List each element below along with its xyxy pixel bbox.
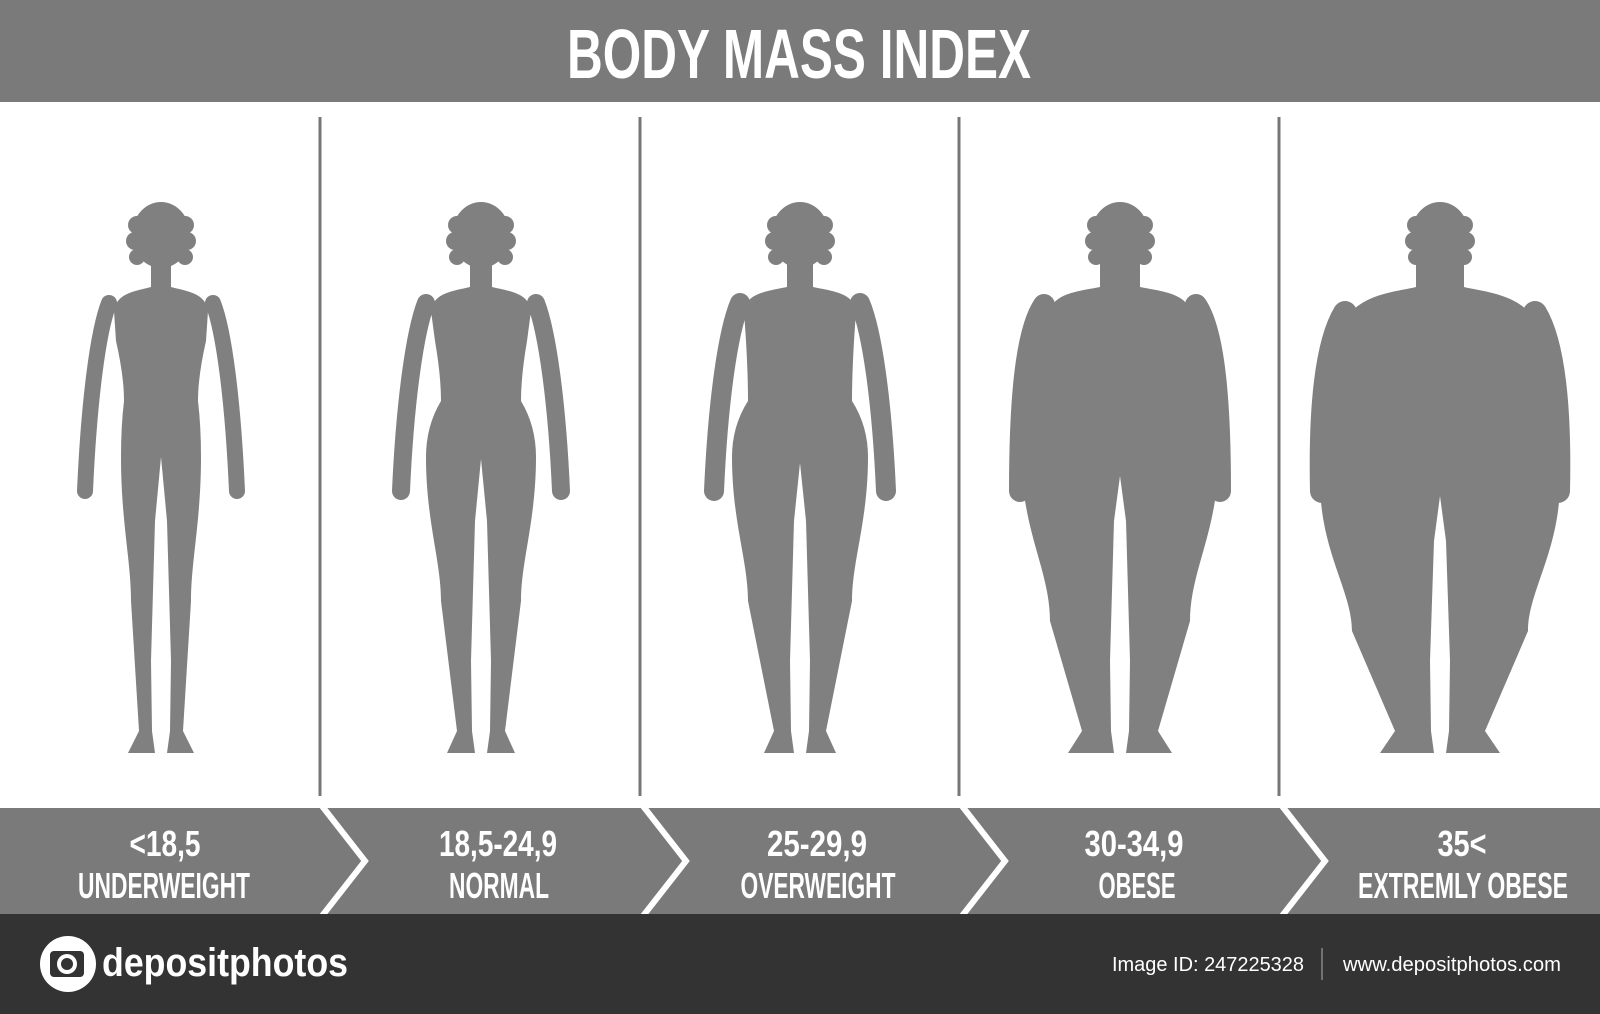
chevron arrows	[322, 806, 1325, 916]
label: normal	[439, 823, 557, 906]
label: obese: OBESE	[1098, 865, 1176, 906]
icon: logo camera	[40, 936, 96, 992]
separators	[320, 117, 1279, 796]
label: overweight: 25-29,9	[767, 823, 867, 864]
figure: extremely obese	[1320, 202, 1560, 753]
label: underweight: UNDERWEIGHT	[78, 865, 250, 906]
figure: overweight	[714, 202, 886, 753]
category band	[0, 806, 1600, 916]
label: obese: 30-34,9	[1084, 823, 1184, 864]
logo text: depositphotos	[102, 941, 348, 985]
label: normal: NORMAL	[449, 865, 549, 906]
figure: obese	[1020, 202, 1220, 753]
header bar	[0, 0, 1600, 102]
label: overweight	[740, 823, 896, 906]
title: BODY MASS INDEX	[567, 15, 1031, 93]
label: underweight	[78, 823, 250, 906]
website: www.depositphotos.com	[1342, 954, 1561, 976]
image id: Image ID: 247225328	[1112, 954, 1304, 976]
label: obese	[1084, 823, 1184, 906]
label: extremely obese	[1358, 823, 1568, 906]
label: extremely obese: 35<	[1438, 823, 1486, 864]
footer	[0, 914, 1600, 1014]
label: overweight: OVERWEIGHT	[740, 865, 896, 906]
figure: underweight	[85, 202, 237, 753]
label: underweight: <18,5	[130, 823, 200, 864]
label: normal: 18,5-24,9	[439, 823, 557, 864]
figure: normal	[401, 202, 561, 753]
